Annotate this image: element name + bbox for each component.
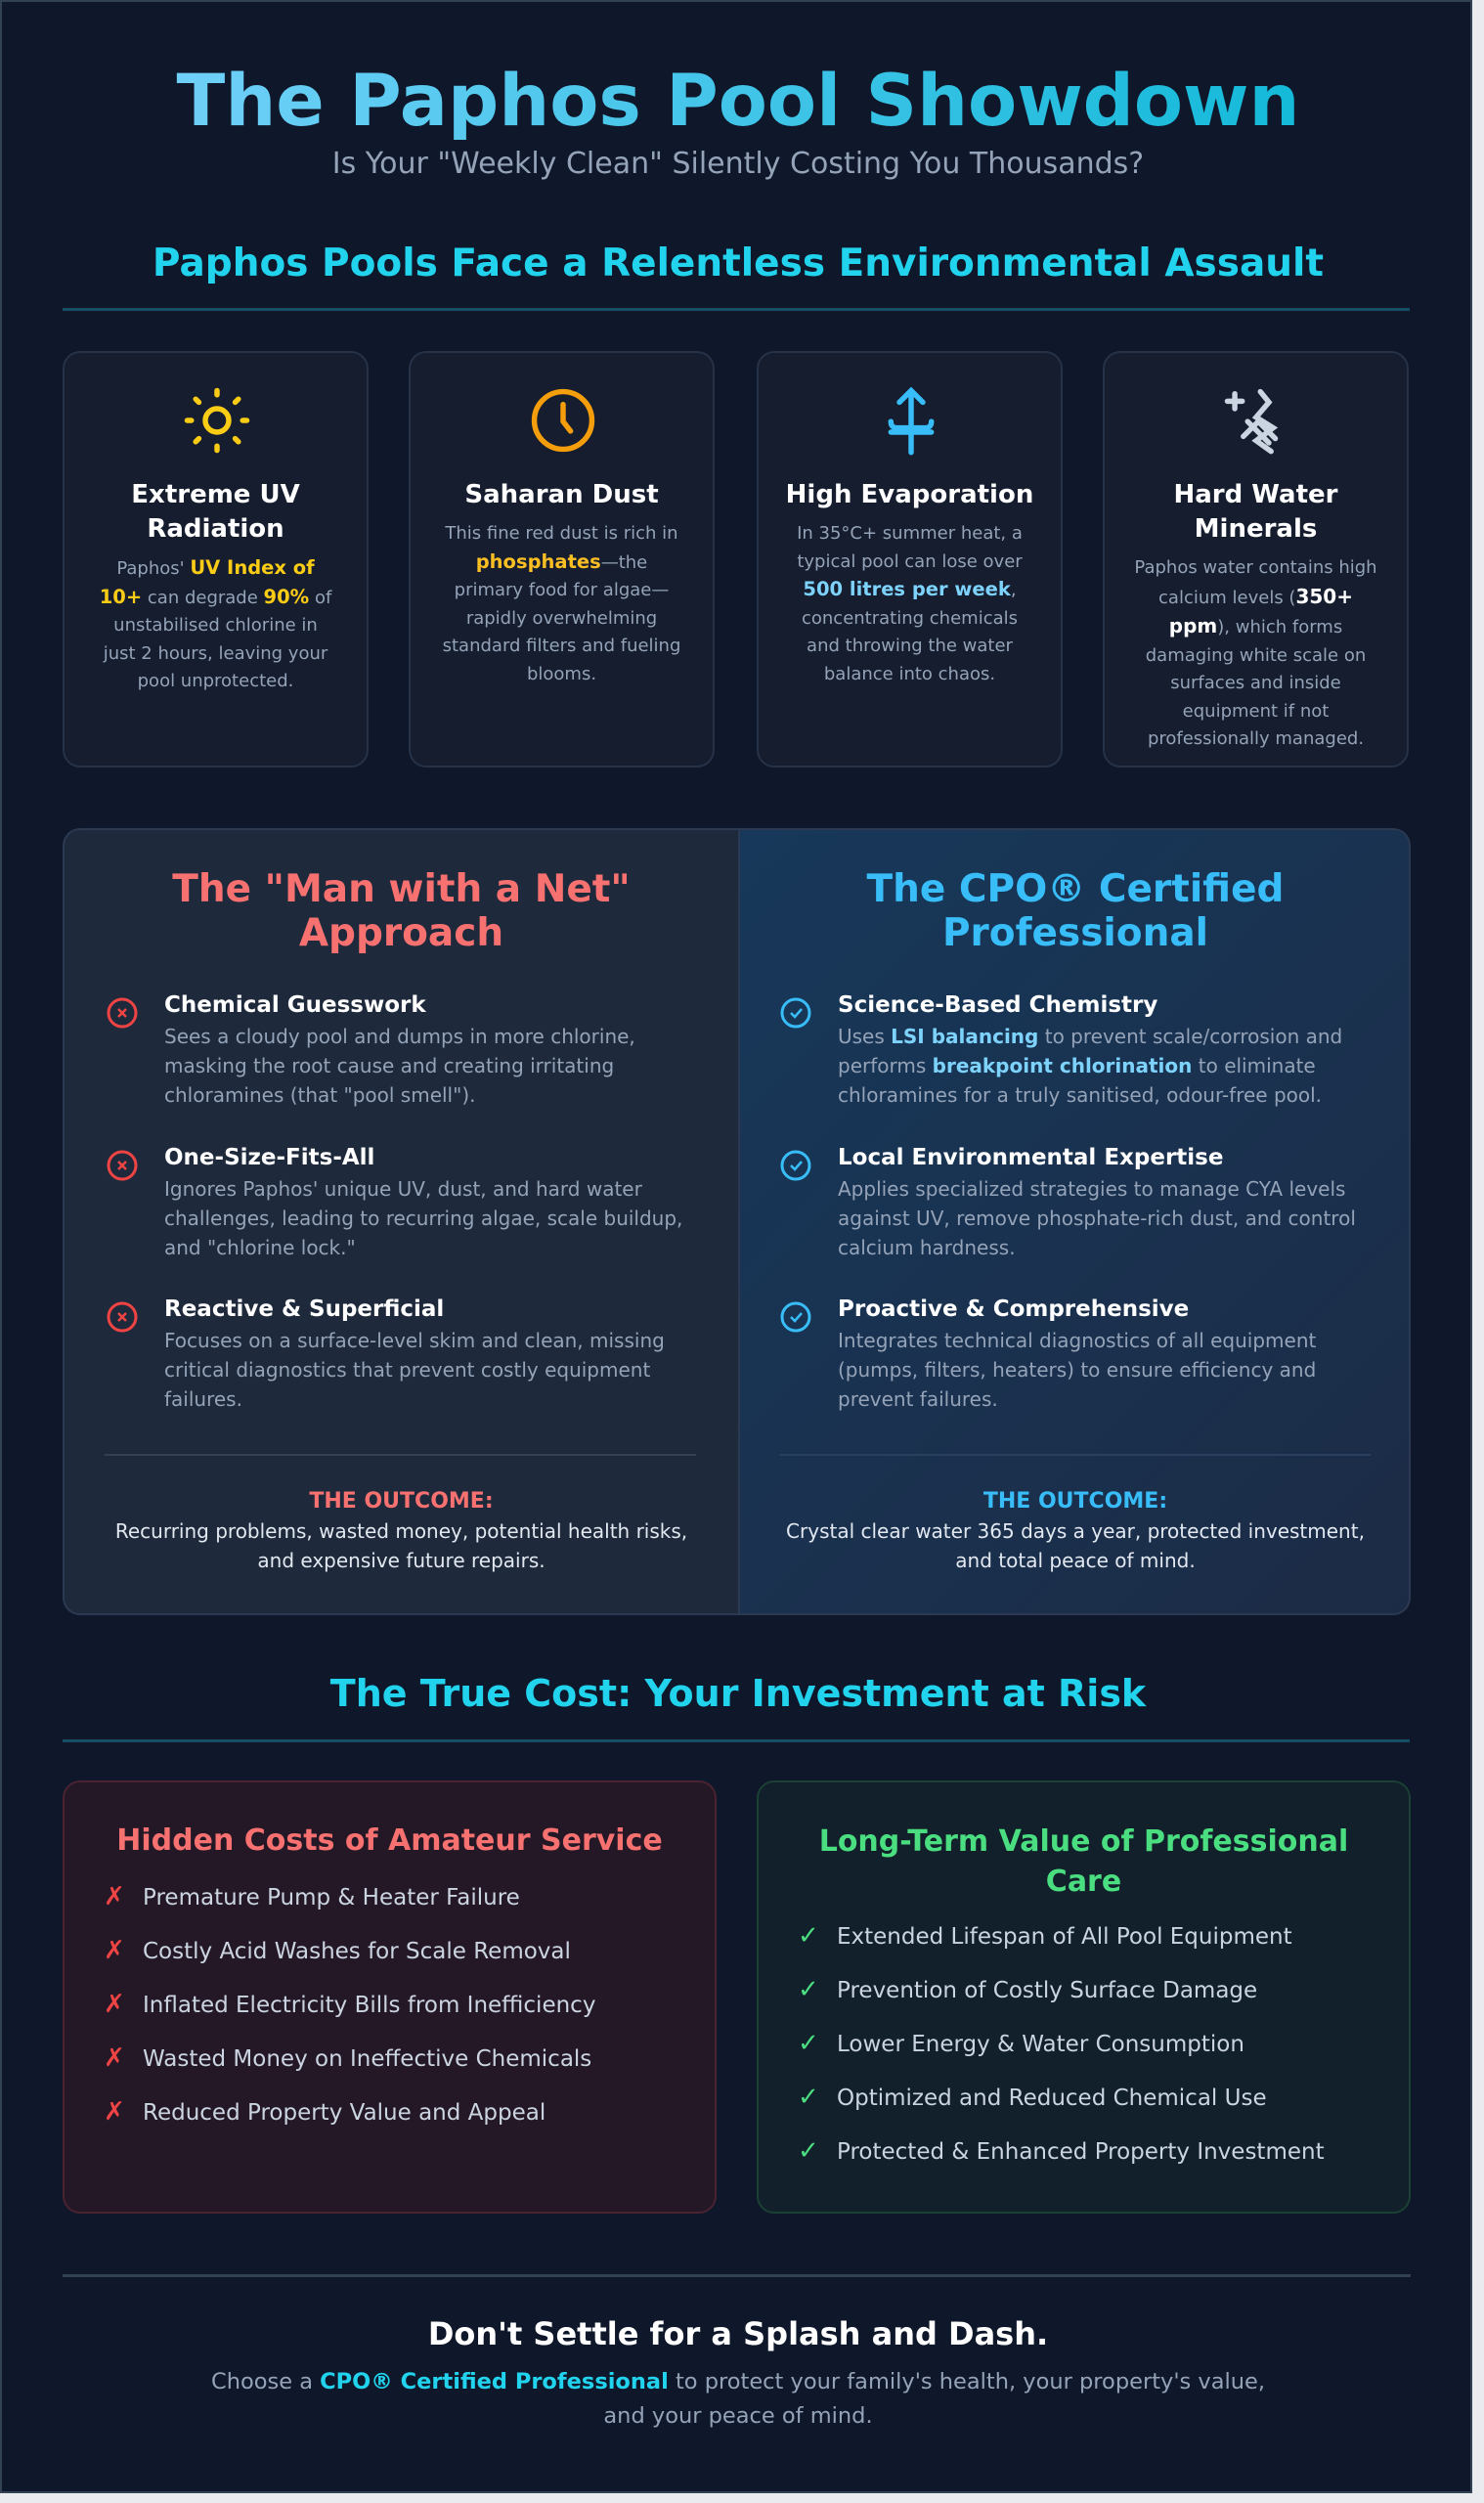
item: science [780,992,1342,1107]
icon: evaporation [888,387,935,456]
list: benefits: ✓ [798,2083,819,2112]
list: costs: ✗ [104,2097,125,2127]
heading: CPO: The CPO® Certified [867,867,1284,911]
list: benefits: Prevention of Costly Surface Damage [837,1978,1257,2003]
footer text: and your peace of mind. [603,2403,873,2429]
panel: UV [63,351,369,768]
panel: hard water [1103,351,1409,768]
outcome: amateur: and expensive future repairs. [257,1549,546,1572]
panel: dust: Saharan Dust [464,480,659,509]
panel: comparison: Sees a cloudy pool and dumps in more chlorine, masking the root cause and creating irritating chloramines (that "pool smell"). [164,1025,635,1107]
panel: comparison: Focuses on a surface-level skim and clean, missing critical diagnostics that prevent costly equipment failures. [164,1329,665,1411]
footer text [211,2369,1265,2429]
outcome: professional: and total peace of mind. [955,1549,1196,1572]
panel: comparison: Reactive & Superficial [164,1296,444,1322]
panel: comparison: Ignores Paphos' unique UV, dust, and hard water challenges, leading to recurring algae, scale buildup, and "chlorine lock." [164,1177,682,1259]
title [2,55,1474,149]
item: one size [108,1145,682,1259]
panel: UV: Paphos' UV Index of 10+ can degrade 90% of unstabilised chlorine in just 2 hours, leaving your pool unprotected. [100,556,331,691]
panel: comparison: Science-Based Chemistry [838,992,1157,1018]
list: benefits: Extended Lifespan of All Pool Equipment [837,1924,1292,1950]
list: costs: ✗ [104,1882,125,1911]
outcome: amateur: THE OUTCOME: [309,1489,494,1514]
item: guesswork [108,992,635,1107]
outcome: professional: Crystal clear water 365 days a year, protected investment, [786,1519,1365,1543]
list: costs: Inflated Electricity Bills from Inefficiency [143,1993,595,2018]
panel: hard water: Paphos water contains high calcium levels (350+ ppm), which forms damaging white scale on surfaces and inside equipment if not professionally managed. [1134,557,1377,749]
item: proactive [780,1296,1316,1411]
panel: comparison: Uses LSI balancing to prevent scale/corrosion and performs breakpoint chlorination to eliminate chloramines for a truly sanitised, odour-free pool. [838,1025,1342,1107]
panel: long-term value [757,1780,1411,2214]
list: benefits: ✓ [798,2029,819,2058]
panel: comparison: Proactive & Comprehensive [838,1296,1189,1322]
list: benefits: ✓ [798,1921,819,1951]
heading: true cost: The True Cost: Your Investment at Risk [330,1672,1146,1715]
item: reactive [108,1296,665,1411]
heading: CPO: Professional [942,911,1208,955]
list: costs: Costly Acid Washes for Scale Removal [143,1939,571,1964]
subtitle: Is Your "Weekly Clean" Silently Costing You Thousands? [332,147,1144,181]
icon: sun [184,387,250,454]
footer text: Choose a CPO® Certified Professional to protect your family's health, your property's value, [211,2369,1265,2394]
list: costs: ✗ [104,2043,125,2073]
footer heading: Don't Settle for a Splash and Dash. [428,2315,1048,2352]
heading: man with a net: The "Man with a Net" [172,867,631,911]
panel: comparison: Integrates technical diagnostics of all equipment (pumps, filters, heaters) to ensure efficiency and prevent failures. [838,1329,1316,1411]
panel: comparison: Local Environmental Expertise [838,1145,1223,1170]
list: benefits: ✓ [798,2136,819,2166]
list: benefits [798,1921,1325,2166]
icon: minerals [1224,389,1279,454]
panel: evaporation: High Evaporation [786,480,1033,509]
panel: hidden costs [63,1780,717,2214]
heading: value: Long-Term Value of Professional Care [819,1824,1348,1899]
list: benefits: Protected & Enhanced Property Investment [837,2139,1325,2165]
list: costs [104,1882,595,2127]
list: costs: ✗ [104,1990,125,2019]
list: costs: ✗ [104,1936,125,1965]
panel: evaporation [757,351,1063,768]
panel: comparison [63,828,1411,1615]
outcome: amateur: Recurring problems, wasted money, potential health risks, [115,1519,687,1543]
heading: CPO [866,867,1284,955]
panel: comparison: Chemical Guesswork [164,992,426,1018]
list: costs: Premature Pump & Heater Failure [143,1885,520,1910]
panel: hard water: Hard Water Minerals [1173,480,1337,544]
outcome: professional: THE OUTCOME: [983,1489,1167,1514]
list: benefits: Optimized and Reduced Chemical Use [837,2086,1267,2111]
heading: environmental assault: Paphos Pools Face a Relentless Environmental Assault [153,242,1324,285]
outcome: amateur [115,1489,687,1572]
panel: comparison: One-Size-Fits-All [164,1145,374,1170]
outcome: professional [786,1489,1365,1572]
list: costs: Wasted Money on Ineffective Chemicals [143,2046,591,2072]
panel: comparison: Applies specialized strategies to manage CYA levels against UV, remove phosphate-rich dust, and control calcium hardness. [838,1177,1356,1259]
panel: dust [409,351,715,768]
heading: man with a net: Approach [299,911,503,955]
panel: UV: Extreme UV Radiation [131,480,300,544]
list: benefits: Lower Energy & Water Consumption [837,2032,1244,2057]
panel: dust: This fine red dust is rich in phosphates—the primary food for algae—rapidly overwhelming standard filters and fueling blooms. [443,523,680,684]
heading: man with a net [172,867,631,955]
list: costs: Reduced Property Value and Appeal [143,2100,546,2126]
panel: evaporation: In 35°C+ summer heat, a typical pool can lose over 500 litres per week, concentrating chemicals and throwing the water balance into chaos. [797,523,1023,684]
list: benefits: ✓ [798,1975,819,2004]
title: The Paphos Pool Showdown [177,60,1299,143]
heading: hidden costs: Hidden Costs of Amateur Service [116,1823,663,1858]
item: local [780,1145,1356,1259]
icon: clock [532,389,594,452]
